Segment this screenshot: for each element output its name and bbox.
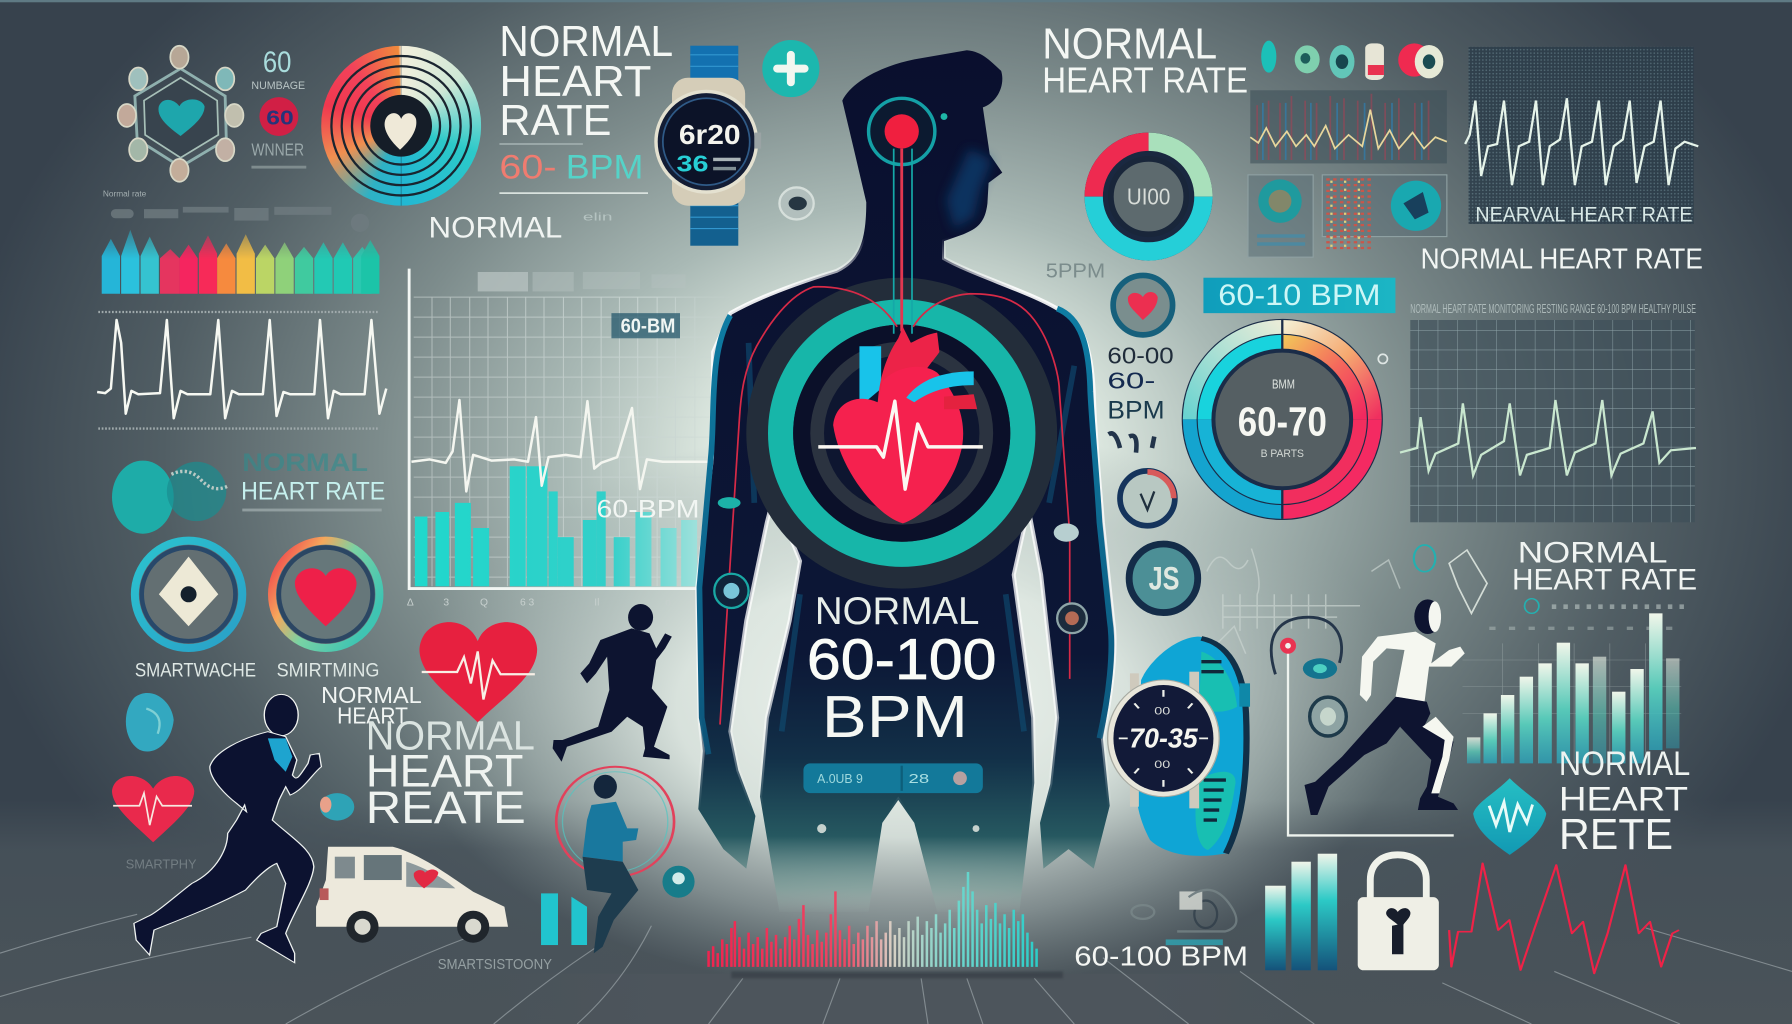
title: normal heart rate top right: NORMAL (1042, 20, 1217, 68)
heading: normal: NORMAL (429, 212, 562, 245)
title: normal heart rate: BPM (566, 148, 643, 186)
icon: padlock with heart keyhole (1358, 855, 1439, 970)
label: 60 with captions (103, 46, 306, 199)
smartwatch with 60-20 face (656, 46, 761, 246)
head target and wires (720, 98, 1070, 725)
three gradient bars (1265, 854, 1337, 970)
large gauge: 60-70 (1182, 319, 1387, 520)
dark runner silhouette (553, 604, 672, 762)
icon: large heart with ECG (419, 622, 537, 722)
stacked labels: 60-100 BPM (1107, 342, 1174, 453)
chip: 60-10 BPM: 60-10 BPM (1218, 279, 1381, 312)
red ECG line (1449, 863, 1679, 973)
clock ring icon (1120, 471, 1175, 526)
grid chart: 60-BPM bars and ECG (407, 269, 731, 609)
grid chart: 60-BPM bars and ECG: Q (480, 598, 488, 609)
icon row (1261, 41, 1443, 80)
grid chart: 60-BPM bars and ECG: 60-BPM (597, 496, 699, 524)
bottom waveform (709, 872, 1037, 967)
grid chart: 60-BPM bars and ECG: Δ (407, 598, 414, 609)
label: 60 with captions: 60 (263, 46, 291, 79)
icon: small swirl button (779, 187, 814, 219)
chart frame with pin (1271, 617, 1454, 835)
label: normal heart reate large: REATE (366, 782, 526, 833)
central label: normal 60-100 BPM: BPM (822, 683, 968, 750)
label: normal heart rete: HEART (1559, 780, 1688, 818)
wrist smartwatch (1108, 637, 1250, 856)
bar chart: gradient columns (1463, 613, 1681, 763)
grid chart: 60-BPM bars and ECG: 3 (443, 598, 449, 609)
label: normal heart rete: RETE (1559, 811, 1673, 859)
donut gauge (1085, 133, 1213, 261)
heading: normal heart rate: NORMAL HEART RATE (1421, 244, 1703, 276)
label: normal heart rete (1559, 745, 1690, 859)
van with heart (316, 847, 508, 943)
large runner silhouette (134, 694, 321, 963)
network diagram: heart with circular nodes (118, 46, 243, 182)
central human silhouette (697, 50, 1115, 912)
title: normal heart rate: NORMAL (499, 18, 673, 66)
anatomical heart with ECG (818, 327, 983, 523)
grid chart: 60-BPM bars and ECG: 6 3 (520, 598, 535, 609)
smartwatch with 60-20 face: 6r20 (679, 119, 741, 150)
heart rate label with blobs (112, 449, 385, 534)
smartwatch ring icon: heart (272, 541, 379, 682)
grid chart: 60-BPM bars and ECG: o (665, 598, 671, 609)
label: 60 with captions: WNNER (251, 139, 304, 159)
title: normal heart rate top right: HEART RATE (1042, 60, 1248, 101)
concentric heart rate target (321, 46, 481, 206)
label: normal heart small (321, 682, 422, 728)
title: normal heart rate (499, 18, 673, 193)
watch time text: 00 (1154, 705, 1170, 717)
colour level bars (102, 207, 379, 294)
music ring icon (1129, 544, 1198, 613)
white ECG line (97, 312, 386, 429)
white and black runner (1304, 599, 1465, 815)
label: 60 with captions: Normal rate (103, 190, 147, 199)
label: normal heart rate lower right (1512, 536, 1697, 597)
icon: small heart with ECG (112, 776, 194, 842)
heading: normal (429, 212, 613, 245)
heading: normal: elin (583, 212, 613, 224)
title: normal heart rate: RATE (499, 97, 611, 145)
central label: normal 60-100 BPM: NORMAL (815, 590, 979, 633)
large gauge: 60-70: B PARTS (1261, 448, 1304, 460)
title: normal heart rate top right (1042, 20, 1248, 101)
icon: medical plus badge (762, 40, 819, 97)
donut gauge: UI00 (1127, 184, 1170, 210)
small emblem panels (1248, 175, 1447, 257)
label: normal heart rate lower right: NORMAL (1518, 536, 1667, 569)
small multicolour ECG chart (1250, 90, 1447, 163)
grid chart: 60-BPM bars and ECG: Il (594, 598, 599, 609)
central label: normal 60-100 BPM: 60-100 (807, 628, 997, 692)
grid chart: 60-BPM bars and ECG: 60-BM (621, 315, 675, 338)
music ring icon: JS (1149, 561, 1179, 597)
label: normal heart reate large: NORMAL (366, 713, 535, 759)
dark ECG panel: NEARVAL HEART RATE (1475, 202, 1693, 227)
faint floor gadgets (1131, 890, 1236, 945)
watch time text: 70-35 (1129, 722, 1198, 753)
dark ECG panel (1465, 47, 1698, 227)
label: 60 with captions: 60 (266, 107, 294, 130)
arm nodes (714, 497, 1087, 833)
label: normal heart rete: NORMAL (1559, 745, 1690, 783)
stacked labels: 60-100 BPM: 60-00 (1107, 342, 1174, 368)
label: 60 with captions: NUMBAGE (251, 80, 306, 92)
central info pill (803, 763, 983, 793)
chest rings (746, 278, 1057, 589)
person inside hoop (541, 767, 695, 953)
label: 60-100 BPM: 60-100 BPM (1074, 941, 1248, 972)
label: normal heart small: HEART (337, 702, 408, 728)
dark grid ECG chart (1400, 302, 1696, 522)
icon: teal blob (126, 693, 174, 751)
label: normal heart reate large: HEART (366, 745, 523, 796)
smartwatch ring icon: eye: SMARTWACHE (135, 660, 256, 682)
side emblems above runner (1414, 545, 1690, 628)
faint caption: floor text: SMARTPHY (126, 858, 197, 872)
faint caption: floor text (126, 858, 552, 973)
central label: normal 60-100 BPM (807, 590, 997, 750)
large gauge: 60-70: BMM (1272, 378, 1295, 392)
label: normal heart reate large (366, 713, 535, 833)
central info pill: A.0UB 9 (817, 772, 863, 786)
heart ring icon (1113, 275, 1173, 335)
smartwatch ring icon: eye (135, 541, 256, 682)
watch time text (1129, 705, 1198, 771)
stacked labels: 60-100 BPM: BPM (1107, 396, 1165, 424)
heart rate label with blobs: NORMAL (242, 449, 368, 477)
faint doodles (1207, 549, 1400, 654)
stacked labels: 60-100 BPM: 60- (1107, 368, 1155, 394)
faint caption: floor text: SMARTSISTOONY (438, 957, 552, 973)
label: normal heart rate lower right: HEART RATE (1512, 564, 1697, 597)
central info pill: 28 (909, 772, 929, 786)
title: normal heart rate: HEART (499, 58, 651, 106)
icon: teal shield with pulse (1473, 778, 1546, 855)
icon: capsule device (320, 793, 354, 821)
smartwatch ring icon: heart: SMIRTMING (277, 660, 379, 682)
watch time text: 00 (1154, 759, 1170, 771)
title: normal heart rate: 60- (499, 148, 557, 186)
smartwatch with 60-20 face: 36 (677, 150, 709, 176)
large gauge: 60-70: 60-70 (1238, 398, 1327, 444)
heart rate label with blobs: HEART RATE (241, 477, 385, 505)
label: normal heart small: NORMAL (321, 682, 422, 708)
faint label: BPM: 5PPM (1046, 260, 1105, 283)
